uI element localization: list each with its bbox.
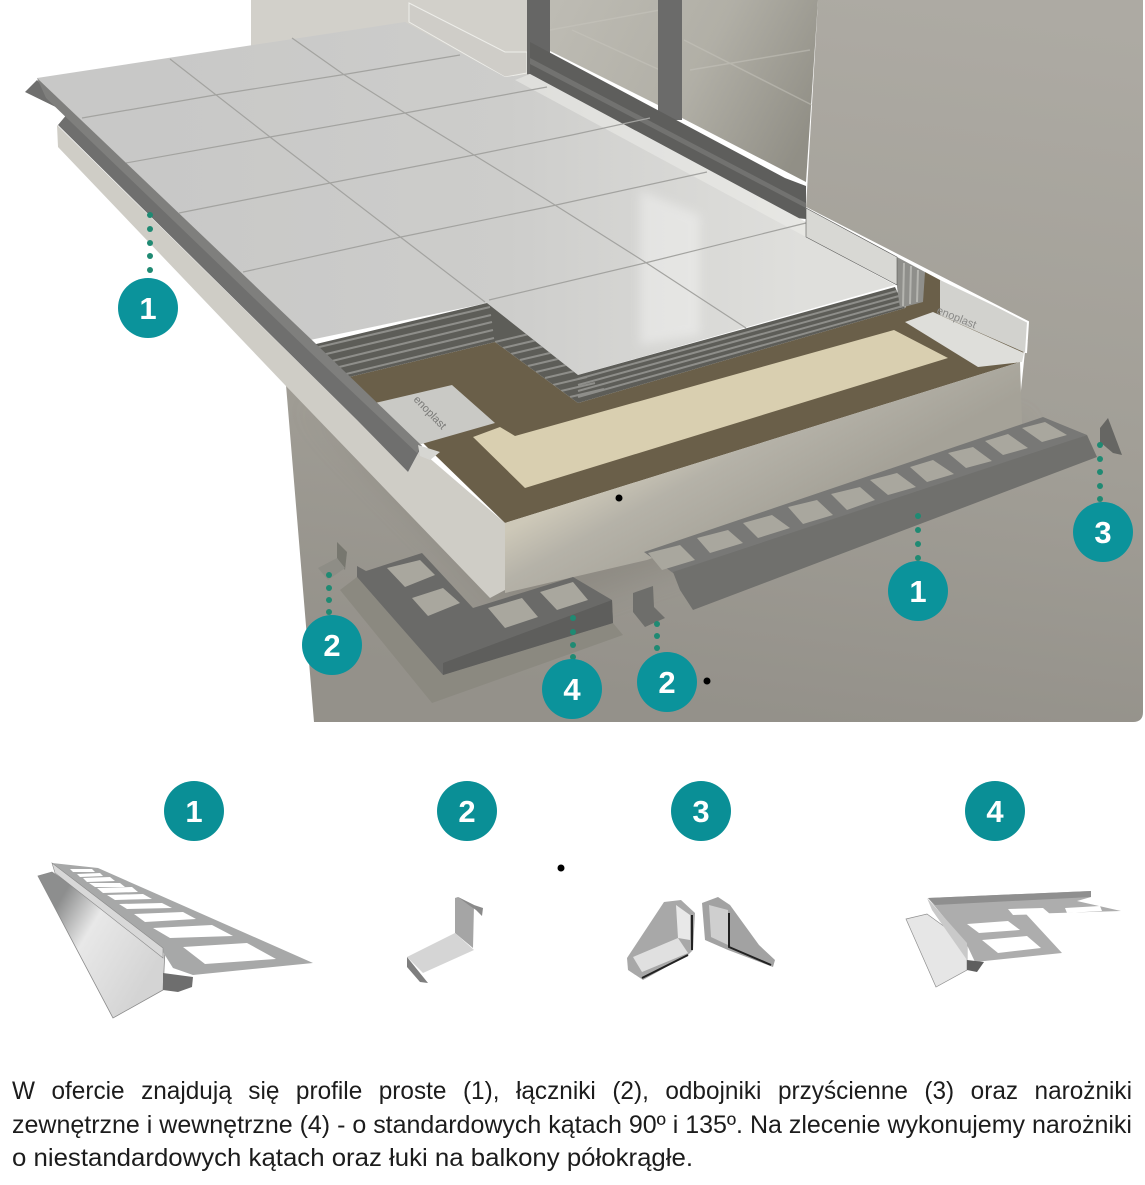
icon: straight profile product (38, 863, 313, 1018)
badge 1 right: 1 (909, 574, 927, 609)
leader dots to profile 1 right (915, 513, 921, 561)
beige screed layer (473, 330, 948, 488)
right cap (702, 897, 775, 967)
left edge profile (25, 80, 422, 472)
membrane corner right with logo (806, 208, 1028, 367)
badge 4: 4 (563, 672, 581, 707)
door threshold strip (806, 208, 897, 285)
stray black dots (616, 494, 710, 684)
concrete slab side face (57, 125, 505, 598)
text block: description: zewnętrzne i wewnętrzne (4) - o standardowych kątach 90º i 135º. Na zlecenie wykonujemy narożniki (12, 1111, 1132, 1139)
right wall (806, 0, 1143, 330)
legend badge 1 (164, 781, 224, 841)
badge 1 right (888, 561, 948, 621)
brown waterproofing layer (345, 272, 1028, 523)
leader dots to corner 4 (570, 615, 576, 660)
end cap 3 (1100, 418, 1122, 455)
corner profile 4 exploded (340, 553, 623, 703)
connector 2 left (318, 542, 347, 580)
connector 2 centre (633, 586, 665, 627)
badge 1 left (118, 278, 178, 338)
legend badge 4: 4 (986, 794, 1004, 829)
badge 2 centre: 2 (658, 665, 676, 700)
tile joints (82, 38, 806, 328)
text block: description: o niestandardowych kątach oraz łuki na balkony półokrągłe. (12, 1144, 693, 1172)
legend badge 2: 2 (458, 794, 476, 829)
window (527, 0, 818, 219)
text block: description: W ofercie znajdują się profile proste (1), łączniki (2), odbojniki przyścienne (3) oraz narożniki (12, 1077, 1132, 1105)
icon: corner product (906, 891, 1121, 987)
stray black dot (558, 864, 564, 872)
badge 1 left: 1 (139, 291, 157, 326)
wall base trim (409, 3, 527, 77)
leader dots to cap 3 (1097, 442, 1103, 502)
legend badge 1: 1 (185, 794, 203, 829)
text block: description (12, 1077, 1132, 1172)
icon: wall end caps product (627, 897, 775, 980)
lower wall under the balcony (286, 322, 1143, 722)
legend badge 3 (671, 781, 731, 841)
leader dots to profile 1 left (147, 212, 153, 273)
badge 2 left: 2 (323, 628, 341, 663)
panel: balcony cutaway illustration (25, 0, 1143, 722)
leader dots to connector 2 left (326, 572, 332, 615)
badge 2 left (302, 615, 362, 675)
upper wall behind terrace (251, 0, 532, 80)
legend badge 2 (437, 781, 497, 841)
icon: connector product (407, 897, 483, 983)
soft shadow under the slab (300, 400, 1020, 620)
floor tiles (37, 22, 895, 375)
badge 4 (542, 659, 602, 719)
glossy reflections on tiles (640, 190, 700, 345)
straight profile 1 exploded (644, 417, 1097, 610)
leader dots to connector 2 centre (654, 621, 660, 651)
membrane corner left with logo: enoplast (411, 394, 448, 432)
adhesive and slab layers (25, 78, 1028, 598)
concrete slab front face (505, 362, 1022, 593)
left cap (627, 900, 695, 980)
badge 3: 3 (1094, 515, 1112, 550)
membrane corner left with logo (375, 385, 495, 445)
legend badge 4 (965, 781, 1025, 841)
badge 3 (1073, 502, 1133, 562)
legend badge 3: 3 (692, 794, 710, 829)
ribbed adhesive (312, 257, 925, 403)
membrane corner right with logo: enoplast (935, 305, 978, 331)
badge 2 centre (637, 652, 697, 712)
